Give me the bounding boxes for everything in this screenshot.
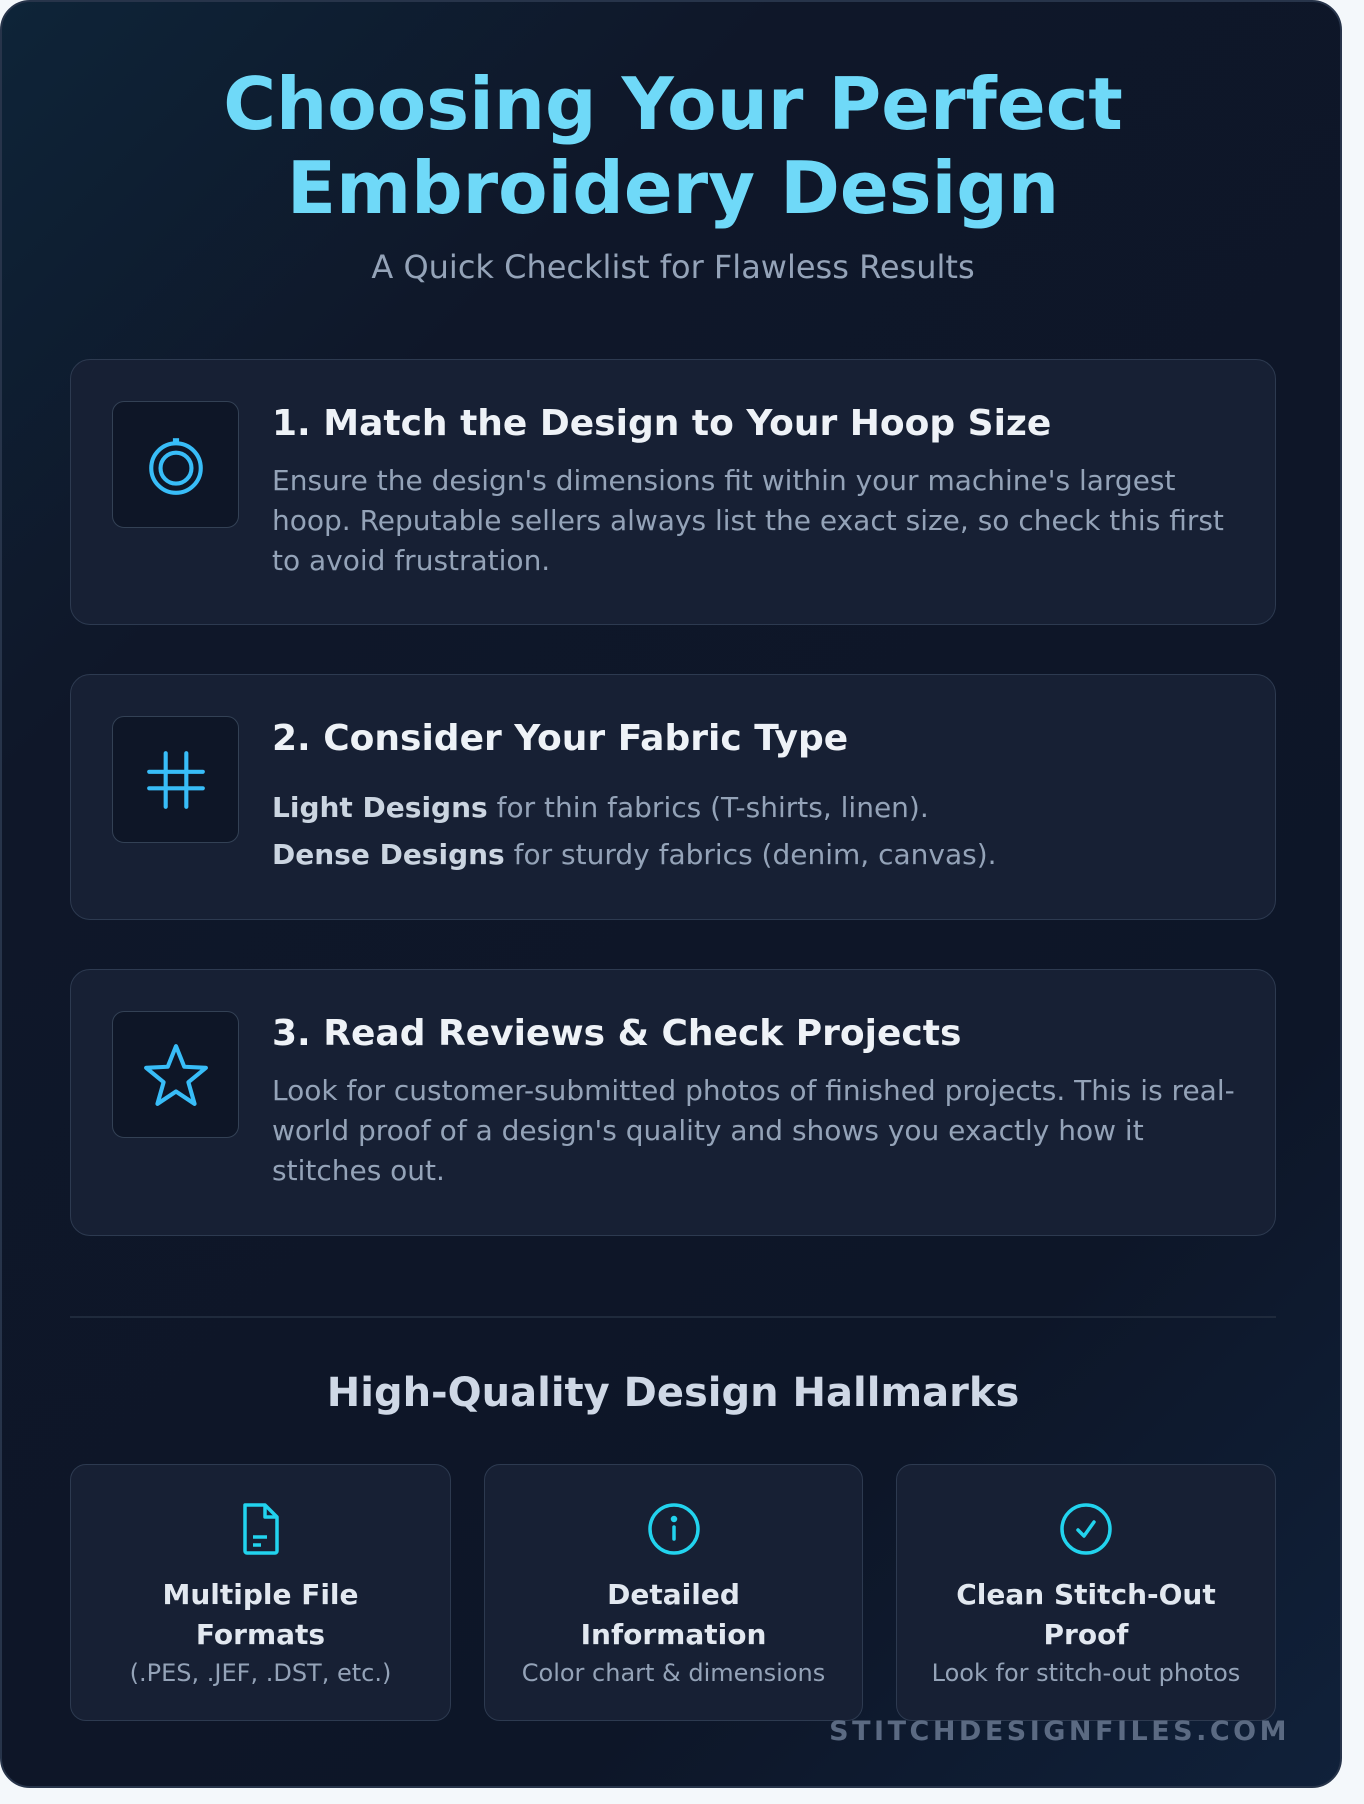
- footer brand: STITCHDESIGNFILES.COM: [829, 1716, 1290, 1747]
- card: detailed info: [484, 1464, 863, 1721]
- subtitle: A Quick Checklist for Flawless Results: [371, 248, 975, 286]
- heading: 2. Consider Your Fabric Type: [272, 718, 848, 759]
- label: Multiple File: [162, 1578, 359, 1611]
- label: Clean Stitch-Out: [956, 1578, 1216, 1611]
- label: Detailed: [607, 1578, 740, 1611]
- sublabel: Color chart & dimensions: [522, 1659, 825, 1687]
- icon: hoop: [112, 401, 239, 528]
- icon: star: [112, 1011, 239, 1138]
- panel: step 2: [70, 674, 1276, 920]
- label: [162, 1578, 359, 1651]
- heading: 1. Match the Design to Your Hoop Size: [272, 403, 1051, 444]
- card: stitch-out proof: [896, 1464, 1276, 1721]
- sublabel: Look for stitch-out photos: [932, 1659, 1240, 1687]
- label: Information: [581, 1618, 766, 1651]
- icon: grid: [112, 716, 239, 843]
- heading: 3. Read Reviews & Check Projects: [272, 1013, 961, 1054]
- icon: file: [243, 1503, 279, 1555]
- icon: info: [648, 1503, 700, 1555]
- label: Formats: [196, 1618, 325, 1651]
- section heading: High-Quality Design Hallmarks: [327, 1370, 1019, 1416]
- label: [581, 1578, 766, 1651]
- title: Choosing Your Perfect: [223, 62, 1123, 146]
- text: Look for customer-submitted photos of finished projects. This is real-world proof of a design's quality and shows you exactly how it stitches out.: [272, 1074, 1235, 1187]
- text: Dense Designs for sturdy fabrics (denim, canvas).: [272, 838, 997, 871]
- text: Ensure the design's dimensions fit within your machine's largest hoop. Reputable sellers always list the exact size, so check this first to avoid frustration.: [272, 464, 1224, 577]
- title: [223, 62, 1123, 230]
- panel: step 1: [70, 359, 1276, 625]
- title: Embroidery Design: [287, 146, 1059, 230]
- card: file formats: [70, 1464, 451, 1721]
- panel: step 3: [70, 969, 1276, 1236]
- text: Light Designs for thin fabrics (T-shirts, linen).: [272, 791, 929, 824]
- label: [956, 1578, 1216, 1651]
- text: [272, 791, 997, 871]
- icon: check: [1060, 1503, 1112, 1555]
- label: Proof: [1044, 1618, 1128, 1651]
- sublabel: (.PES, .JEF, .DST, etc.): [130, 1659, 391, 1687]
